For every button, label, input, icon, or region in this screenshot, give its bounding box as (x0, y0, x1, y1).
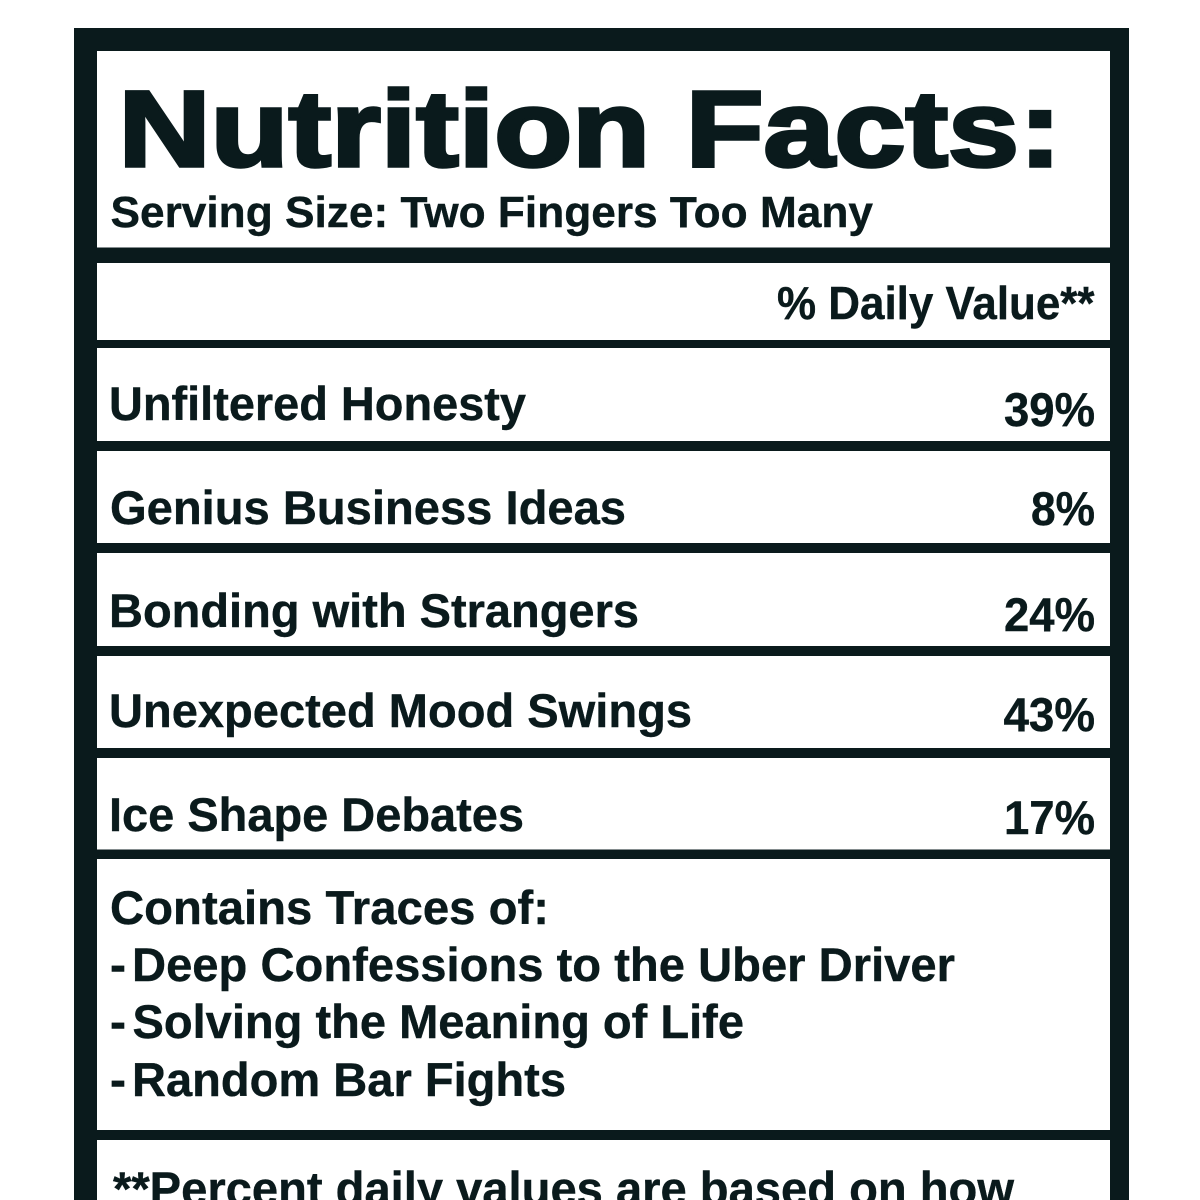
row: unexpected mood swings (109, 684, 1095, 741)
contains traces list (110, 881, 955, 1106)
row: genius business ideas: Genius Business Ideas (110, 481, 626, 534)
row: unfiltered honesty (109, 377, 1095, 436)
row: bonding with strangers: 24% (1004, 588, 1095, 641)
contains traces list: - (110, 995, 126, 1048)
row: ice shape debates: 17% (1004, 791, 1095, 844)
row: unexpected mood swings: Unexpected Mood Swings (109, 684, 692, 737)
contains traces list: Deep Confessions to the Uber Driver (132, 938, 955, 991)
row: bonding with strangers (109, 584, 1095, 641)
serving size: Serving Size: Two Fingers Too Many (110, 188, 874, 237)
contains traces list: - (110, 938, 126, 991)
daily value heading: % Daily Value** (777, 277, 1095, 329)
contains traces list: Solving the Meaning of Life (132, 995, 744, 1048)
title: Nutrition Facts: (118, 68, 1062, 189)
contains traces list: Contains Traces of: (110, 881, 549, 934)
row: bonding with strangers: Bonding with Strangers (109, 584, 639, 637)
row: genius business ideas: 8% (1031, 482, 1095, 535)
contains traces list: Random Bar Fights (132, 1053, 566, 1106)
row: unfiltered honesty: Unfiltered Honesty (109, 377, 526, 430)
row: unfiltered honesty: 39% (1004, 383, 1095, 436)
row: ice shape debates (109, 788, 1095, 844)
row: ice shape debates: Ice Shape Debates (109, 788, 524, 841)
row: unexpected mood swings: 43% (1004, 688, 1095, 741)
row: genius business ideas (110, 481, 1095, 535)
contains traces list: - (110, 1053, 126, 1106)
